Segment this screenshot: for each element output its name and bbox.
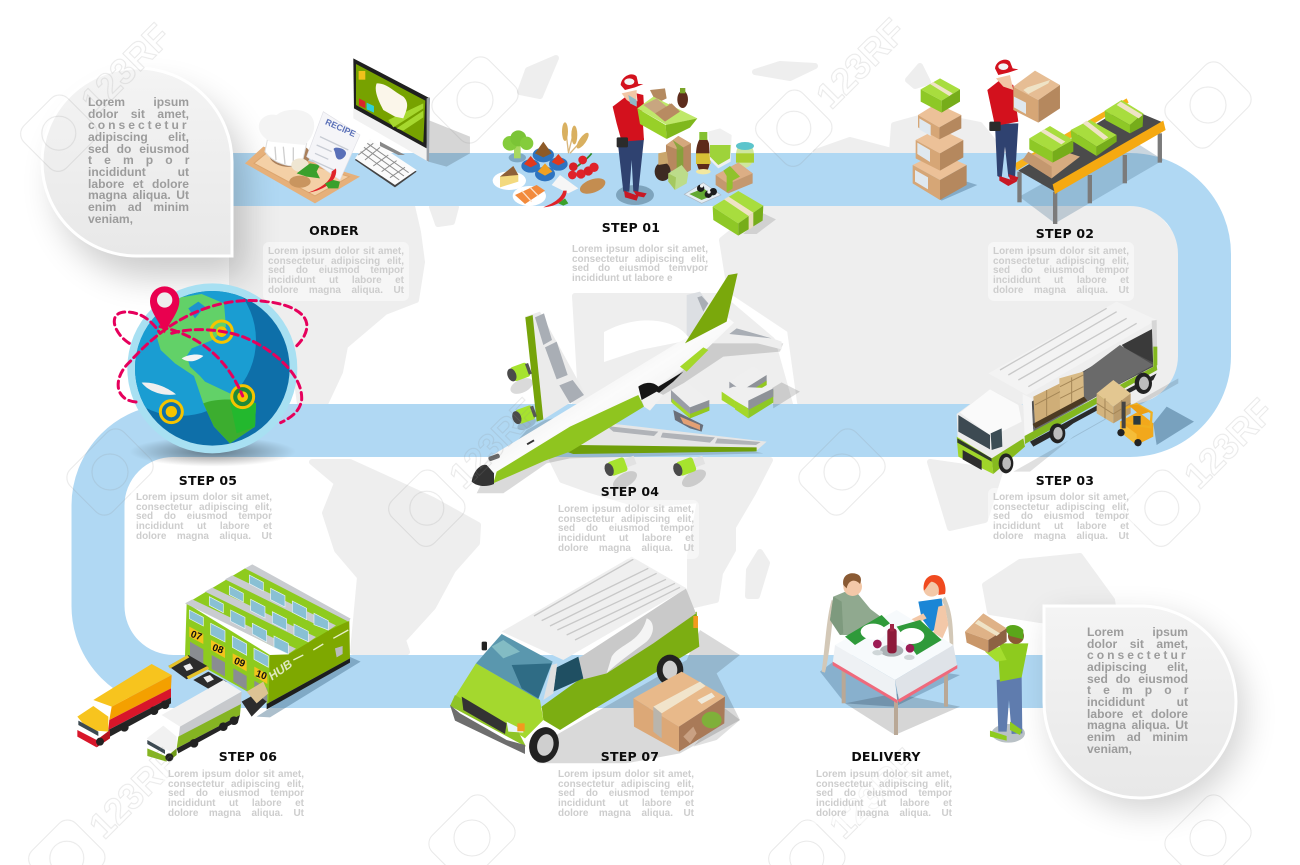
heading: step 03: STEP 03 (1036, 473, 1094, 488)
illustration: step 02 conveyor and packer (913, 60, 1166, 224)
text: step 06: Lorem ipsum dolor sit amet, (168, 769, 304, 780)
illustration: step 07 van and parcel (450, 557, 740, 766)
loading docks (168, 655, 268, 717)
text: order: incididunt ut labore et (268, 275, 404, 286)
packer figure (987, 60, 1018, 186)
text: order: consectetur adipiscing elit, (268, 256, 404, 267)
text: step 06: incididunt ut labore et (168, 798, 304, 809)
green parcel (713, 191, 776, 236)
hub lettering: HUB (266, 657, 295, 683)
parcel (633, 672, 740, 752)
heading: step 04: STEP 04 (601, 484, 659, 499)
watermark stamps: 123RF (73, 16, 178, 121)
recipe sheet (307, 112, 360, 180)
computer monitor (353, 58, 430, 162)
illustration: order (245, 58, 470, 203)
heading: step 06: STEP 06 (219, 749, 277, 764)
bubble text: bottom right: incididunt ut (1087, 695, 1188, 709)
text: step 04: incididunt ut labore et (558, 533, 694, 544)
forklift (1117, 402, 1194, 446)
heading: step 02: STEP 02 (1036, 226, 1094, 241)
bubble text: top left: Lorem ipsum (88, 95, 189, 109)
van wheels (525, 655, 683, 766)
bay numbers: 10 (254, 668, 269, 683)
text: step 07 (558, 770, 694, 819)
bubble text: top left: sed do eiusmod (88, 142, 189, 156)
tail stabilisers (687, 292, 782, 349)
bubble text: bottom right: veniam, (1087, 742, 1132, 756)
bay numbers (189, 627, 269, 684)
near wing (525, 312, 585, 422)
bubble text: bottom right: magna aliqua. Ut (1087, 718, 1188, 732)
delivery road (98, 180, 1204, 682)
white truck (147, 680, 242, 762)
skylight windows (189, 575, 328, 667)
illustration: step 03 truck and forklift (957, 302, 1194, 474)
cab (957, 389, 1025, 474)
table setting (845, 615, 942, 660)
heading: delivery: DELIVERY (851, 749, 921, 764)
bubble text: bottom right: labore et dolore (1087, 707, 1188, 721)
bubble: top left (42, 68, 246, 278)
text: step 07: Lorem ipsum dolor sit amet, (558, 769, 694, 780)
text: order (268, 247, 404, 296)
bubble text: bottom right: adipiscing elit, (1087, 660, 1188, 674)
text: step 06: consectetur adipiscing elit, (168, 779, 304, 790)
text: step 05: consectetur adipiscing elit, (136, 502, 272, 513)
text: step 05: Lorem ipsum dolor sit amet, (136, 492, 272, 503)
bubble text: bottom right: consectetur (1087, 648, 1189, 662)
text: order: Lorem ipsum dolor sit amet, (268, 246, 404, 257)
hub building (185, 564, 361, 717)
text: step 02 (993, 247, 1129, 296)
text: delivery (816, 770, 952, 819)
bubble text: bottom right: tempor (1087, 683, 1201, 697)
text: step 07: sed do eiusmod tempor (558, 788, 694, 799)
watermark stamps: 123RF (808, 11, 913, 116)
green open box (637, 88, 697, 139)
location pin (150, 286, 179, 333)
fresh ingredients (493, 122, 607, 207)
illustration: step 04 airplane (472, 273, 800, 493)
illustration: step 05 globe (112, 283, 308, 466)
text: step 07: consectetur adipiscing elit, (558, 779, 694, 790)
dining table (833, 610, 957, 735)
watermark stamps: 123RF (1176, 391, 1281, 496)
text: step 01: Lorem ipsum dolor sit amet, (572, 244, 708, 255)
illustration: delivery dining couple and courier (820, 573, 1028, 743)
bubble text: top left: consectetur (88, 118, 190, 132)
text: step 06: dolore magna aliqua. Ut (168, 808, 304, 819)
bubble text: top left: magna aliqua. Ut (88, 188, 189, 202)
heading: order: ORDER (309, 223, 359, 238)
bay numbers: 09 (232, 656, 247, 670)
plane shadows (477, 343, 783, 493)
text: order: dolore magna aliqua. Ut (268, 285, 404, 296)
text: step 03: sed do eiusmod tempor (993, 511, 1129, 522)
bubble text: top left: dolor sit amet, (88, 107, 189, 121)
stacked parcels (913, 78, 977, 201)
yellow truck (77, 664, 172, 747)
bubble text: bottom right: dolor sit amet, (1087, 637, 1188, 651)
text: step 02: dolore magna aliqua. Ut (993, 285, 1129, 296)
text: step 05 (136, 493, 272, 542)
text: order: sed do eiusmod tempor (268, 265, 404, 276)
bubble text: top left: incididunt ut (88, 165, 189, 179)
bubble text: top left: labore et dolore (88, 177, 189, 191)
text: delivery: consectetur adipiscing elit, (816, 779, 952, 790)
text: step 05: sed do eiusmod tempor (136, 511, 272, 522)
cargo pallets (1033, 372, 1131, 428)
heading: step 07: STEP 07 (601, 749, 659, 764)
recipe sheet: RECIPE (324, 117, 358, 139)
packaged goods (655, 128, 754, 203)
keyboard (355, 139, 417, 187)
bay doors (190, 642, 267, 703)
text: step 04: consectetur adipiscing elit, (558, 514, 694, 525)
far engines (603, 453, 706, 478)
bubble: bottom right (1044, 606, 1244, 810)
near engines (505, 361, 538, 426)
text: step 02: Lorem ipsum dolor sit amet, (993, 246, 1129, 257)
cargo containers (671, 366, 800, 432)
text: step 03: Lorem ipsum dolor sit amet, (993, 492, 1129, 503)
text: step 04 (558, 505, 694, 554)
text: step 04: dolore magna aliqua. Ut (558, 543, 694, 554)
bubble text: top left (88, 95, 202, 226)
text: step 01: incididunt ut labore e (572, 273, 672, 284)
bay numbers: 07 (189, 629, 204, 643)
table shadow (820, 657, 960, 735)
bubble text: bottom right: enim ad minim (1087, 730, 1188, 744)
courier figure (965, 613, 1028, 743)
bubble text: top left: adipiscing elit, (88, 130, 189, 144)
text: step 03: consectetur adipiscing elit, (993, 502, 1129, 513)
text: step 07: incididunt ut labore et (558, 798, 694, 809)
packer figure (613, 74, 654, 205)
text: step 03: incididunt ut labore et (993, 521, 1129, 532)
parcels on belt (1023, 100, 1143, 178)
trailer (988, 302, 1157, 447)
text: step 02: incididunt ut labore et (993, 275, 1129, 286)
illustration: step 01 ingredients and packer (493, 74, 776, 236)
text: step 03: dolore magna aliqua. Ut (993, 531, 1129, 542)
heading: step 01: STEP 01 (602, 220, 660, 235)
bubble text: top left: enim ad minim (88, 200, 189, 214)
text: step 05: dolore magna aliqua. Ut (136, 531, 272, 542)
text: step 06 (168, 770, 304, 819)
white map gap (604, 320, 690, 362)
bubble text: bottom right: Lorem ipsum (1087, 625, 1188, 639)
text: delivery: Lorem ipsum dolor sit amet, (816, 769, 952, 780)
dashed routes (114, 301, 307, 423)
text: step 06: sed do eiusmod tempor (168, 788, 304, 799)
text: delivery: sed do eiusmod tempor (816, 788, 952, 799)
text: step 05: incididunt ut labore et (136, 521, 272, 532)
watermark stamps: 123RF (441, 391, 546, 496)
text: step 07: dolore magna aliqua. Ut (558, 808, 694, 819)
conveyor table (1015, 98, 1166, 224)
far wing (563, 423, 767, 454)
watermark stamps: 123RF (81, 741, 186, 846)
bubble text: top left: tempor (88, 153, 202, 167)
text: step 01: consectetur adipiscing elit, (572, 254, 708, 265)
van body (450, 557, 699, 754)
world map background (232, 58, 1176, 652)
text: step 03 (993, 493, 1129, 542)
watermark stamps: 123RF (821, 741, 926, 846)
text: delivery: dolore magna aliqua. Ut (816, 808, 952, 819)
cutting board (245, 110, 360, 203)
truck wheels (999, 373, 1152, 473)
continents (142, 294, 256, 443)
chilli and leaves (308, 168, 340, 193)
bubble text: bottom right (1087, 625, 1201, 756)
text: delivery: incididunt ut labore et (816, 798, 952, 809)
man at table (822, 573, 885, 673)
bay numbers: 08 (211, 642, 225, 657)
fuselage (472, 273, 738, 486)
bubble text: top left: veniam, (88, 212, 133, 226)
text: step 02: consectetur adipiscing elit, (993, 256, 1129, 267)
text: step 02: sed do eiusmod tempor (993, 265, 1129, 276)
text: step 04: sed do eiusmod tempor (558, 523, 694, 534)
bubble text: bottom right: sed do eiusmod (1087, 672, 1188, 686)
roof strips (185, 564, 351, 654)
carried parcel (1013, 71, 1060, 123)
heading: step 05: STEP 05 (179, 473, 237, 488)
route rings (160, 321, 254, 423)
woman at table (900, 575, 953, 647)
text: step 01 (572, 245, 708, 284)
text: step 01: sed do eiusmod temvpor (572, 263, 708, 274)
text: step 04: Lorem ipsum dolor sit amet, (558, 504, 694, 515)
illustration: step 06 hub and trucks (77, 564, 361, 762)
